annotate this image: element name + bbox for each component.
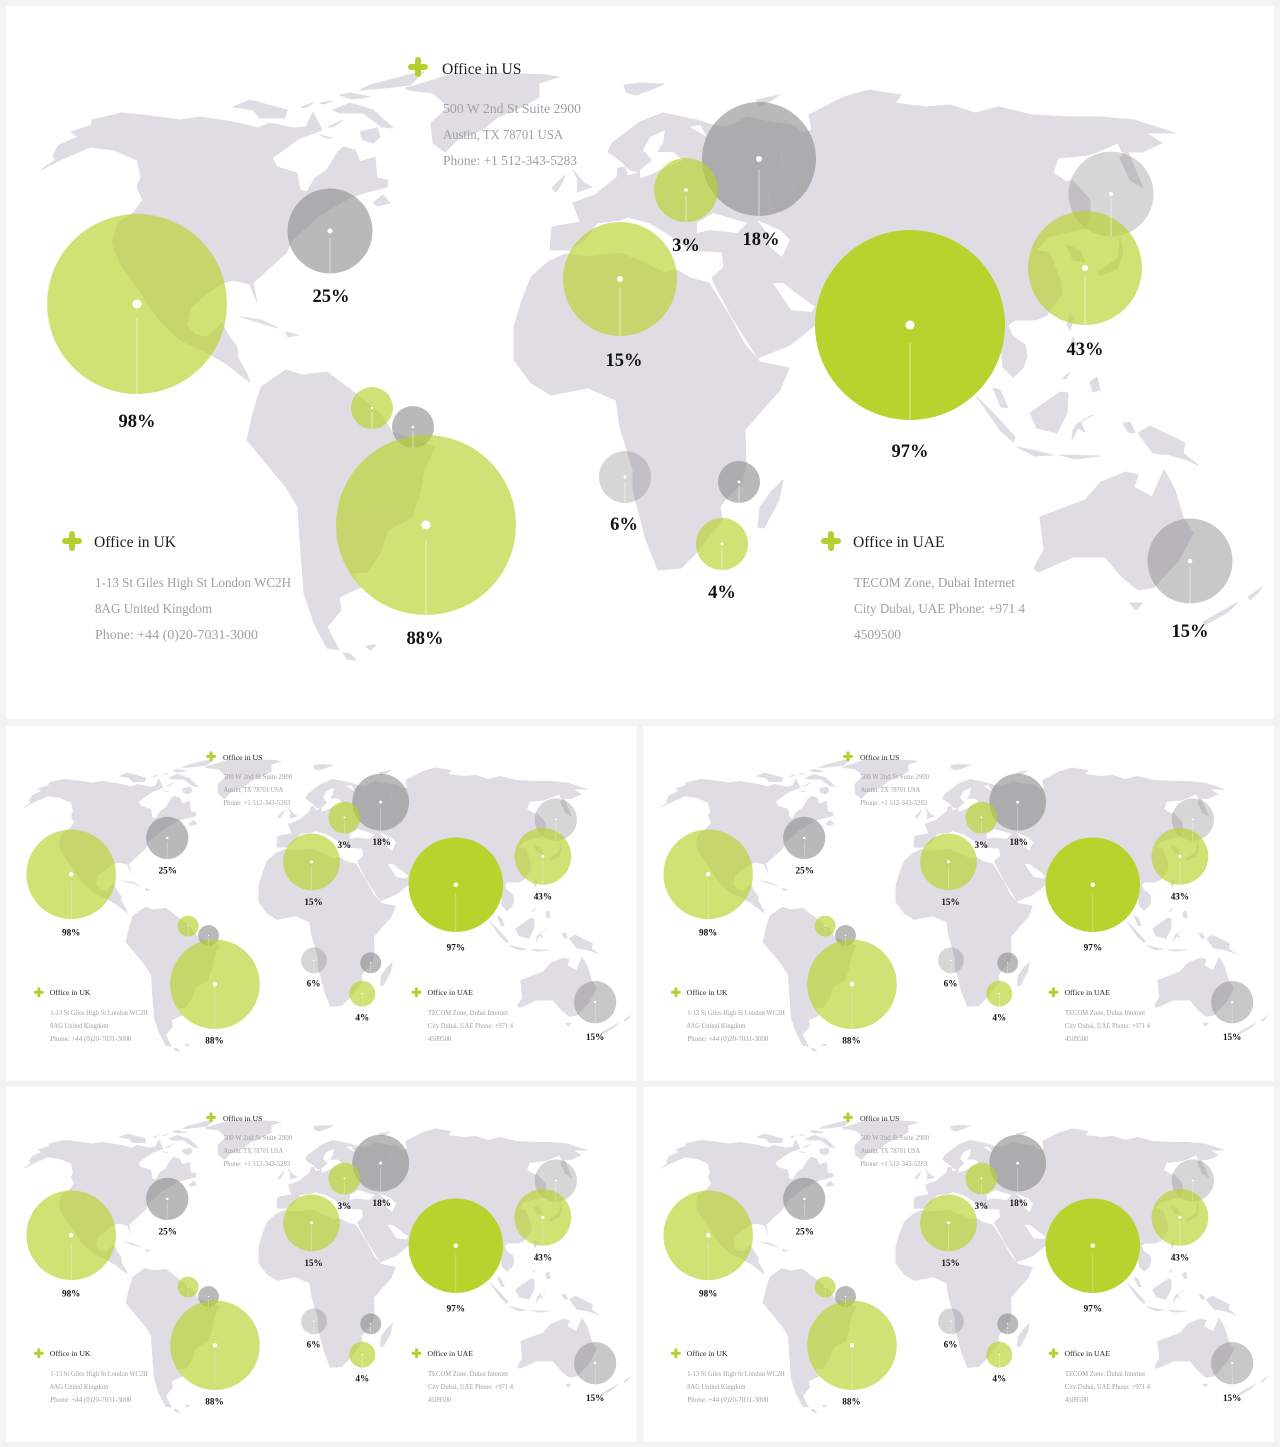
panel: thumbnail bottom right: 6% [944, 1340, 957, 1350]
panel: thumbnail bottom left: 15% [586, 1393, 604, 1403]
panel: thumbnail bottom right: 4% [992, 1374, 1006, 1384]
panel: thumbnail top left: Austin, TX 78701 USA [223, 786, 283, 794]
office: US: Austin, TX 78701 USA [443, 128, 564, 143]
panel: thumbnail bottom left: Office in US [223, 1114, 262, 1123]
panel: thumbnail top left: 4509500 [428, 1035, 452, 1043]
panel: thumbnail bottom right: 18% [1010, 1198, 1028, 1208]
panel: thumbnail top right: 25% [796, 865, 814, 875]
panel: thumbnail top left: 18% [373, 837, 391, 847]
percent labels: 4% [708, 583, 736, 603]
office: UAE [824, 534, 1025, 643]
percent labels: 97% [892, 442, 928, 462]
panel: thumbnail bottom right: 15% [941, 1258, 960, 1268]
panel: thumbnail bottom right: Office in UK [687, 1349, 728, 1358]
panel: thumbnail bottom right [643, 1087, 1274, 1442]
panel: thumbnail bottom left: TECOM Zone, Dubai Internet [428, 1370, 508, 1378]
office: US: Phone: +1 512-343-5283 [443, 154, 577, 169]
panel: thumbnail top right: Office in UK [687, 988, 728, 997]
panel: thumbnail bottom right: 88% [842, 1396, 861, 1406]
panel: thumbnail top left: City Dubai, UAE Phone: +971 4 [428, 1022, 514, 1030]
panel: thumbnail bottom right: 98% [699, 1288, 717, 1298]
panel: thumbnail top right: 6% [944, 979, 957, 989]
office: UK: Phone: +44 (0)20-7031-3000 [95, 628, 258, 643]
panel: thumbnail bottom left: Office in UAE [427, 1349, 473, 1358]
panel: thumbnail top right: Phone: +1 512-343-5283 [860, 799, 928, 807]
panel: thumbnail top left: 43% [534, 892, 552, 902]
office: UK: Office in UK [94, 534, 177, 551]
world map [41, 72, 1262, 660]
panel: thumbnail top right: Austin, TX 78701 USA [860, 786, 920, 794]
office: UK: 8AG United Kingdom [95, 602, 212, 617]
panel: thumbnail bottom right: 1-13 St Giles High St London WC2H [687, 1370, 785, 1378]
office: UK: 1-13 St Giles High St London WC2H [95, 576, 291, 591]
percent labels: 3% [672, 236, 700, 256]
panel: thumbnail bottom left: 1-13 St Giles High St London WC2H [50, 1370, 148, 1378]
panel: thumbnail top left: 8AG United Kingdom [50, 1022, 109, 1030]
panel: thumbnail top right: City Dubai, UAE Phone: +971 4 [1065, 1022, 1151, 1030]
panel: thumbnail bottom right: City Dubai, UAE Phone: +971 4 [1065, 1383, 1151, 1391]
panel: thumbnail bottom right: Office in US [860, 1114, 899, 1123]
panel: thumbnail top left: TECOM Zone, Dubai Internet [428, 1009, 508, 1017]
panel: thumbnail top left: 500 W 2nd St Suite 2900 [223, 773, 293, 781]
panel: thumbnail top right: 500 W 2nd St Suite 2900 [860, 773, 930, 781]
percent labels [118, 230, 1208, 649]
panel: thumbnail top right: 97% [1084, 942, 1102, 952]
panel: thumbnail top left: Office in UK [50, 988, 91, 997]
panel: thumbnail top left: Office in US [223, 753, 262, 762]
panel: thumbnail top left: 88% [205, 1035, 224, 1045]
panel: thumbnail top left: 4% [355, 1013, 369, 1023]
percent labels: 18% [742, 230, 780, 250]
percent labels: 15% [606, 351, 642, 371]
panel: thumbnail top left: 6% [307, 979, 320, 989]
panel: thumbnail top left: 1-13 St Giles High St London WC2H [50, 1009, 148, 1017]
panel: thumbnail top right: 4% [992, 1013, 1006, 1023]
panel: thumbnail bottom left: 25% [159, 1226, 177, 1236]
panel: thumbnail bottom right: 4509500 [1065, 1396, 1089, 1404]
panel: thumbnail top right: TECOM Zone, Dubai Internet [1065, 1009, 1145, 1017]
panel: thumbnail bottom left: 97% [447, 1303, 465, 1313]
panel: thumbnail top left: 25% [159, 865, 177, 875]
panel: thumbnail bottom left: Phone: +1 512-343-5283 [223, 1160, 291, 1168]
panel: thumbnail bottom right: 3% [974, 1201, 988, 1211]
office: UAE: Office in UAE [853, 534, 945, 551]
panel: thumbnail top left [6, 726, 637, 1081]
panel: thumbnail bottom right: 15% [1223, 1393, 1241, 1403]
panel: thumbnail bottom right: Phone: +1 512-343-5283 [860, 1160, 928, 1168]
panel: thumbnail top right: 3% [974, 840, 988, 850]
percent labels: 6% [610, 515, 638, 535]
office: UAE: City Dubai, UAE Phone: +971 4 [854, 602, 1025, 617]
panel: main slide [6, 6, 1274, 719]
panel: thumbnail top left: 15% [304, 897, 323, 907]
panel: thumbnail bottom left: 88% [205, 1396, 224, 1406]
panel: thumbnail top right: 15% [1223, 1032, 1241, 1042]
panel: thumbnail bottom left: 500 W 2nd St Suite 2900 [223, 1134, 293, 1142]
panel: thumbnail top right: Office in UAE [1064, 988, 1110, 997]
panel: thumbnail bottom right: 43% [1171, 1253, 1189, 1263]
data bubbles [47, 102, 1232, 615]
panel: thumbnail top right: 1-13 St Giles High St London WC2H [687, 1009, 785, 1017]
panel: thumbnail bottom left: 3% [337, 1201, 351, 1211]
percent labels: 15% [1172, 622, 1208, 642]
panel: thumbnail bottom left: 18% [373, 1198, 391, 1208]
office: UK [65, 534, 291, 643]
panel: thumbnail bottom right: 97% [1084, 1303, 1102, 1313]
panel: thumbnail bottom left: Office in UK [50, 1349, 91, 1358]
panel: thumbnail bottom right: TECOM Zone, Dubai Internet [1065, 1370, 1145, 1378]
panel: thumbnail bottom left: 8AG United Kingdom [50, 1383, 109, 1391]
office: UAE: 4509500 [854, 628, 901, 643]
panel: thumbnail bottom right: 500 W 2nd St Suite 2900 [860, 1134, 930, 1142]
percent labels: 43% [1066, 340, 1104, 360]
panel: thumbnail top right: 15% [941, 897, 960, 907]
percent labels: 88% [406, 629, 444, 649]
panel: thumbnail top right [643, 726, 1274, 1081]
office: US: 500 W 2nd St Suite 2900 [443, 102, 581, 117]
panel: thumbnail bottom right: Office in UAE [1064, 1349, 1110, 1358]
panel: thumbnail bottom left [6, 1087, 637, 1442]
panel: thumbnail top right: 43% [1171, 892, 1189, 902]
panel: thumbnail bottom left: 6% [307, 1340, 320, 1350]
panel: thumbnail bottom left: Phone: +44 (0)20-7031-3000 [50, 1396, 132, 1404]
office: US [411, 60, 581, 169]
panel: thumbnail bottom left: 43% [534, 1253, 552, 1263]
panel: thumbnail bottom left: 15% [304, 1258, 323, 1268]
panel: thumbnail bottom right: 25% [796, 1226, 814, 1236]
office: UAE: TECOM Zone, Dubai Internet [854, 576, 1015, 591]
office: US: Office in US [442, 61, 521, 78]
panel: thumbnail bottom left: Austin, TX 78701 USA [223, 1147, 283, 1155]
panel: thumbnail bottom left: 4509500 [428, 1396, 452, 1404]
panel: thumbnail top left: 15% [586, 1032, 604, 1042]
panel: thumbnail top right: 18% [1010, 837, 1028, 847]
panel: thumbnail bottom right: Phone: +44 (0)20-7031-3000 [687, 1396, 769, 1404]
panel: thumbnail top left: Phone: +1 512-343-5283 [223, 799, 291, 807]
panel: thumbnail top right: Phone: +44 (0)20-7031-3000 [687, 1035, 769, 1043]
panel: thumbnail top left: Office in UAE [427, 988, 473, 997]
panel: thumbnail top right: 8AG United Kingdom [687, 1022, 746, 1030]
percent labels: 25% [312, 287, 350, 307]
panel: thumbnail top right: 98% [699, 927, 717, 937]
panel: thumbnail bottom right: 8AG United Kingdom [687, 1383, 746, 1391]
percent labels: 98% [118, 412, 156, 432]
panel: thumbnail top right: 88% [842, 1035, 861, 1045]
panel: thumbnail top left: Phone: +44 (0)20-7031-3000 [50, 1035, 132, 1043]
panel: thumbnail top left: 3% [337, 840, 351, 850]
panel: thumbnail bottom left: 98% [62, 1288, 80, 1298]
panel: thumbnail top right: Office in US [860, 753, 899, 762]
panel: thumbnail top left: 98% [62, 927, 80, 937]
panel: thumbnail bottom left: City Dubai, UAE Phone: +971 4 [428, 1383, 514, 1391]
panel: thumbnail bottom right: Austin, TX 78701 USA [860, 1147, 920, 1155]
panel: thumbnail top left: 97% [447, 942, 465, 952]
panel: thumbnail bottom left: 4% [355, 1374, 369, 1384]
panel: thumbnail top right: 4509500 [1065, 1035, 1089, 1043]
